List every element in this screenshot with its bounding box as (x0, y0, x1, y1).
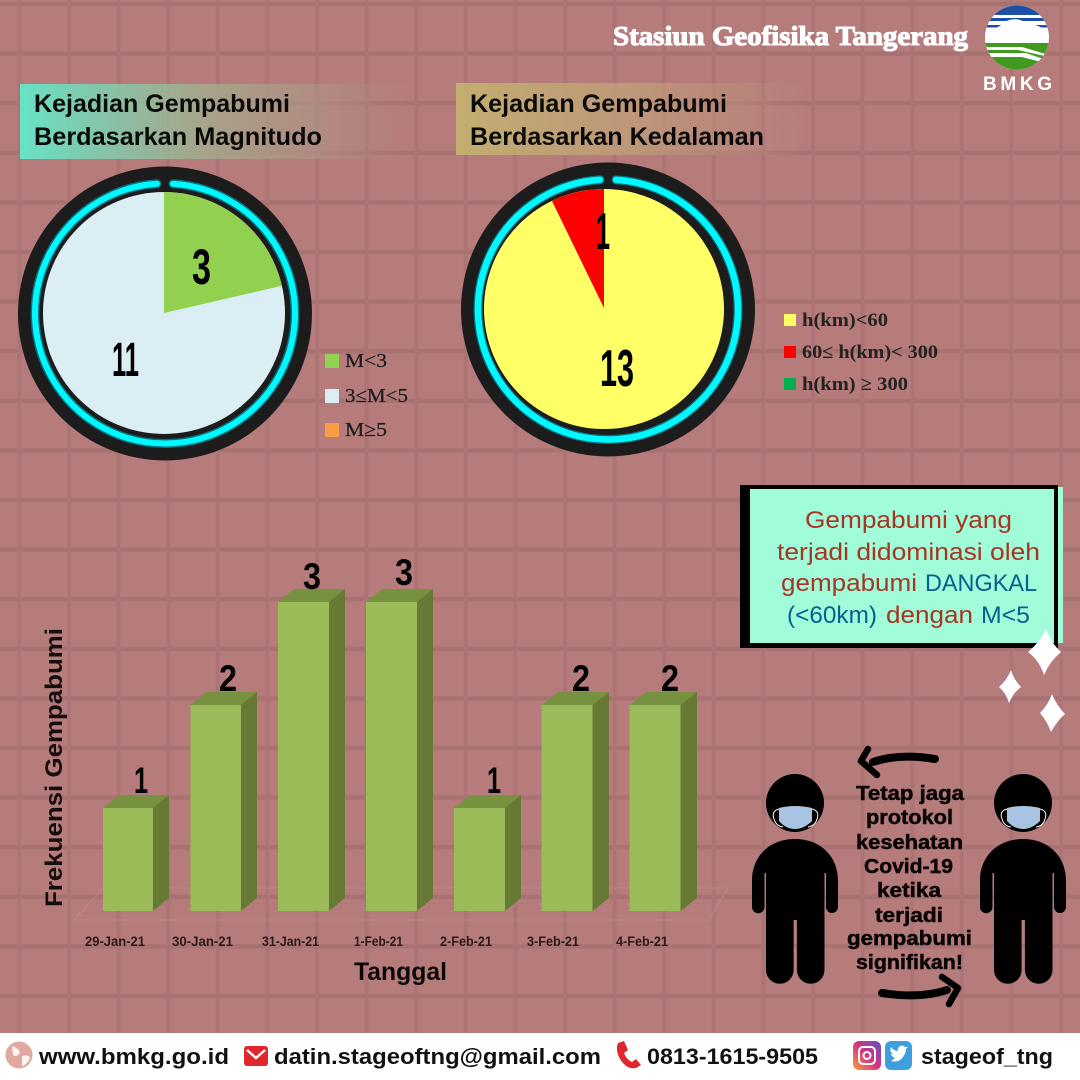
callout: dominant earthquakes: Gempabumi yang (805, 507, 1012, 534)
callout: dominant earthquakes: DANGKAL (925, 570, 1037, 597)
text block: health protocol reminder: signifikan! (856, 952, 963, 974)
value: 13: 13 (600, 340, 634, 398)
social handle: stageof_tng (921, 1044, 1053, 1069)
legend: magnitude: M<3 (345, 350, 387, 372)
x-axis title: Tanggal (354, 958, 447, 986)
pie chart: magnitude (18, 166, 312, 460)
legend: depth: h(km)<60 (802, 310, 888, 331)
pie chart: depth: 1 (596, 203, 610, 261)
bar: 4-Feb-21: 2 (661, 658, 679, 699)
legend: magnitude (325, 350, 408, 441)
bar: 2-Feb-21: 1 (487, 760, 501, 801)
panel heading: magnitude: Kejadian Gempabumi (34, 90, 290, 118)
panel heading: magnitude: Berdasarkan Magnitudo (34, 123, 322, 151)
footer bar (0, 1033, 1080, 1080)
chart floor (74, 888, 728, 920)
bar: 29-Jan-21: 1 (134, 760, 148, 801)
email: datin.stageoftng@gmail.com (274, 1044, 601, 1069)
icon: person with mask (right) (980, 774, 1066, 984)
icon: globe (6, 1042, 32, 1068)
pie chart: depth (461, 162, 755, 456)
callout: dominant earthquakes: M<5 (981, 602, 1030, 629)
x-axis dates: 29-Jan-21 (85, 933, 145, 949)
text block: health protocol reminder: gempabumi (847, 928, 972, 950)
icon: instagram (853, 1041, 881, 1070)
slice: 60-300 km (552, 189, 604, 308)
legend: magnitude: 3≤M<5 (345, 385, 408, 407)
bar: 31-Jan-21 (278, 556, 345, 911)
callout: dominant earthquakes: dengan (886, 602, 973, 629)
callout: dominant earthquakes: gempabumi (781, 570, 917, 597)
bar: 4-Feb-21 (630, 658, 697, 911)
arrow: bottom, pointing right (882, 977, 958, 1004)
legend: depth: 60≤ h(km)< 300 (802, 342, 938, 363)
value: 11: 11 (112, 334, 139, 387)
legend: depth: h(km) ≥ 300 (802, 374, 908, 395)
bar: 2-Feb-21 (454, 760, 521, 911)
bar: 29-Jan-21 (103, 760, 169, 911)
icon: person with mask (left) (752, 774, 838, 984)
icon: phone (617, 1041, 641, 1068)
text block: health protocol reminder: protokol (866, 807, 953, 829)
icon: BMKG logo (985, 5, 1049, 71)
x-axis dates: 31-Jan-21 (262, 933, 319, 949)
header: station name: Stasiun Geofisika Tangerang (613, 21, 969, 51)
x-axis dates (85, 933, 668, 949)
legend: depth (784, 310, 938, 395)
legend: magnitude: M≥5 (345, 419, 387, 441)
callout: dominant earthquakes: (<60km) (787, 602, 877, 629)
bar: 3-Feb-21 (542, 658, 609, 911)
text block: health protocol reminder: Covid-19 (864, 856, 953, 878)
text block: health protocol reminder: kesehatan (856, 832, 963, 854)
text block: health protocol reminder: terjadi (875, 905, 943, 927)
icon: twitter (885, 1041, 912, 1070)
callout: dominant earthquakes (740, 485, 1063, 648)
text block: health protocol reminder (847, 783, 972, 974)
x-axis dates: 1-Feb-21 (354, 933, 403, 949)
value: 3: 3 (192, 239, 211, 295)
text block: health protocol reminder: ketika (877, 880, 942, 902)
x-axis dates: 30-Jan-21 (172, 933, 233, 949)
x-axis dates: 4-Feb-21 (616, 933, 668, 949)
phone number: 0813-1615-9505 (647, 1044, 818, 1069)
y-axis title: Frekuensi Gempabumi (41, 628, 68, 907)
bar: 1-Feb-21 (366, 552, 433, 911)
slice: M<3 (164, 192, 282, 313)
icon: sparkles (999, 629, 1065, 732)
x-axis dates: 2-Feb-21 (440, 933, 492, 949)
website: www.bmkg.go.id (38, 1044, 229, 1069)
text block: health protocol reminder: Tetap jaga (856, 783, 965, 805)
panel heading: depth (456, 83, 810, 155)
panel heading: depth: Kejadian Gempabumi (470, 90, 727, 118)
bar: 1-Feb-21: 3 (395, 552, 413, 593)
x-axis dates: 3-Feb-21 (527, 933, 579, 949)
panel heading: depth: Berdasarkan Kedalaman (470, 123, 764, 151)
bar: 30-Jan-21: 2 (219, 658, 237, 699)
icon: mail (244, 1046, 268, 1066)
arrow: top, pointing left (861, 749, 935, 775)
bar: 3-Feb-21: 2 (572, 658, 590, 699)
logo wordmark: BMKG: BMKG (983, 74, 1052, 95)
panel heading: magnitude (20, 84, 415, 159)
bar: 31-Jan-21: 3 (303, 556, 321, 597)
bar chart: earthquake frequency by date (41, 552, 728, 986)
bar: 30-Jan-21 (190, 658, 257, 911)
callout: dominant earthquakes: terjadi didominasi oleh (777, 539, 1040, 566)
